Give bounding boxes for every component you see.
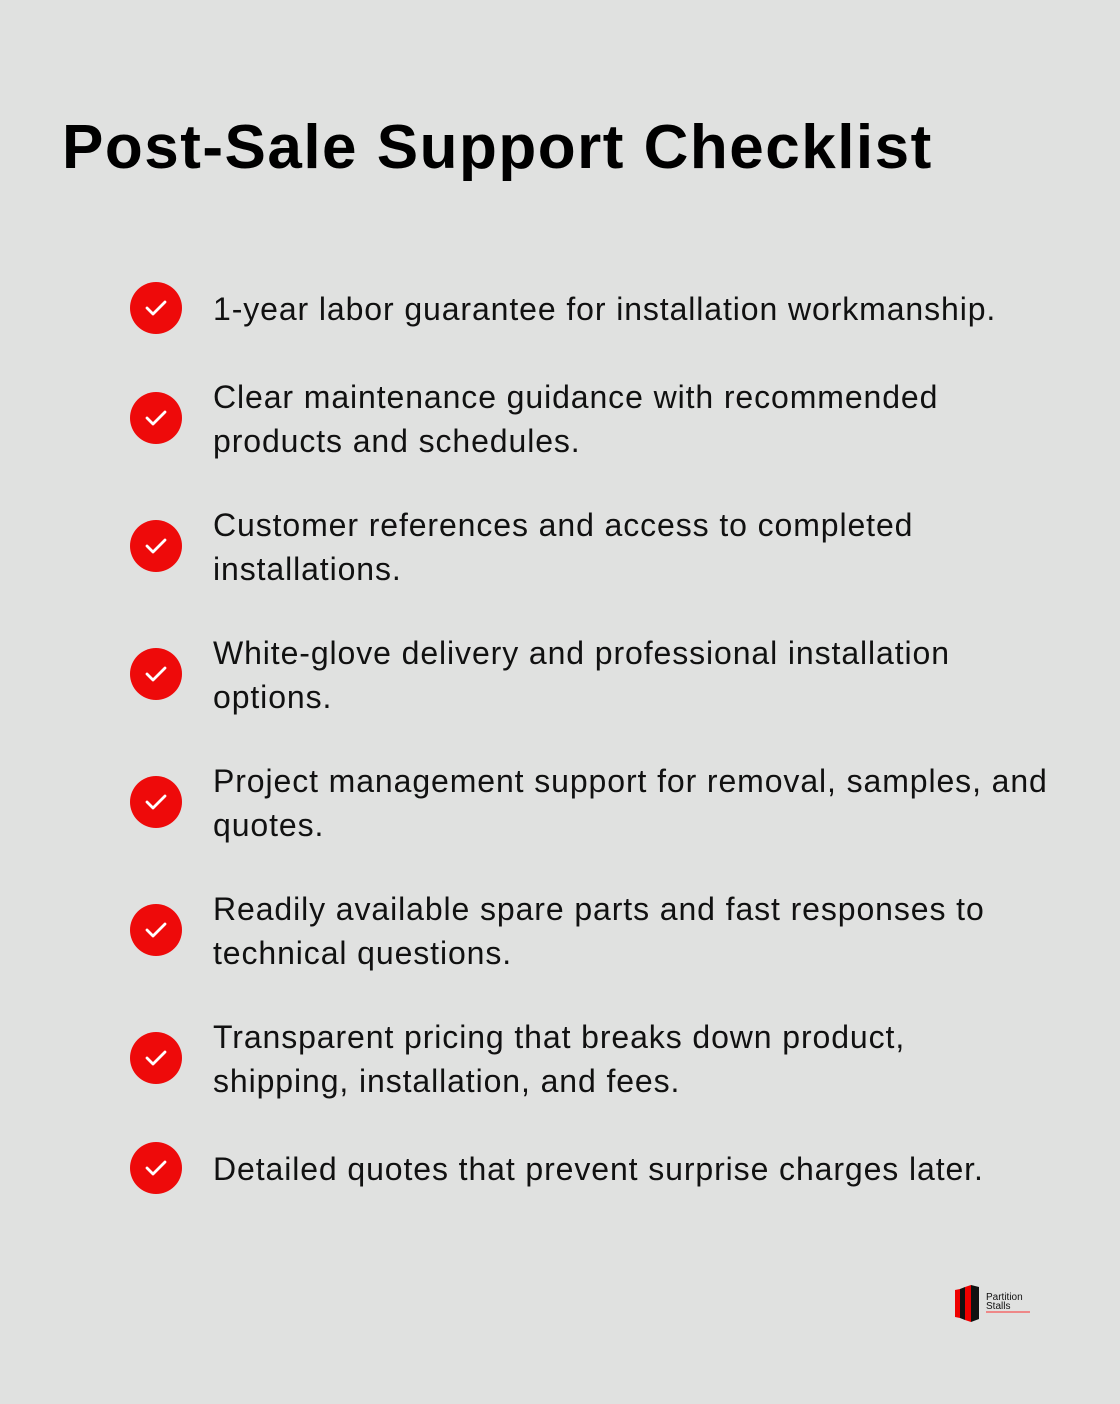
item 7: Transparent pricing that breaks down product, <box>213 1019 905 1055</box>
item 7: shipping, installation, and fees. <box>213 1063 680 1099</box>
item 1: 1-year labor guarantee for installation workmanship. <box>213 291 996 327</box>
item 8 <box>130 1142 984 1194</box>
item 1 <box>130 282 996 334</box>
item 2: products and schedules. <box>213 423 581 459</box>
item 4 <box>130 635 950 715</box>
item 8: Detailed quotes that prevent surprise charges later. <box>213 1151 984 1187</box>
item 3: installations. <box>213 551 402 587</box>
item 6 <box>130 891 985 971</box>
item 5: Project management support for removal, samples, and <box>213 763 1048 799</box>
item 3: Customer references and access to completed <box>213 507 913 543</box>
item 4: options. <box>213 679 332 715</box>
item 2 <box>130 379 938 459</box>
item 2: Clear maintenance guidance with recommended <box>213 379 938 415</box>
item 7 <box>130 1019 905 1099</box>
logo: Partition <box>986 1292 1023 1303</box>
item 4: White-glove delivery and professional installation <box>213 635 950 671</box>
logo: Stalls <box>986 1301 1010 1312</box>
title: Post-Sale Support Checklist <box>62 113 933 182</box>
item 5: quotes. <box>213 807 324 843</box>
logo <box>955 1285 1030 1322</box>
item 5 <box>130 763 1048 843</box>
item 6: technical questions. <box>213 935 512 971</box>
item 3 <box>130 507 913 587</box>
item 6: Readily available spare parts and fast responses to <box>213 891 985 927</box>
